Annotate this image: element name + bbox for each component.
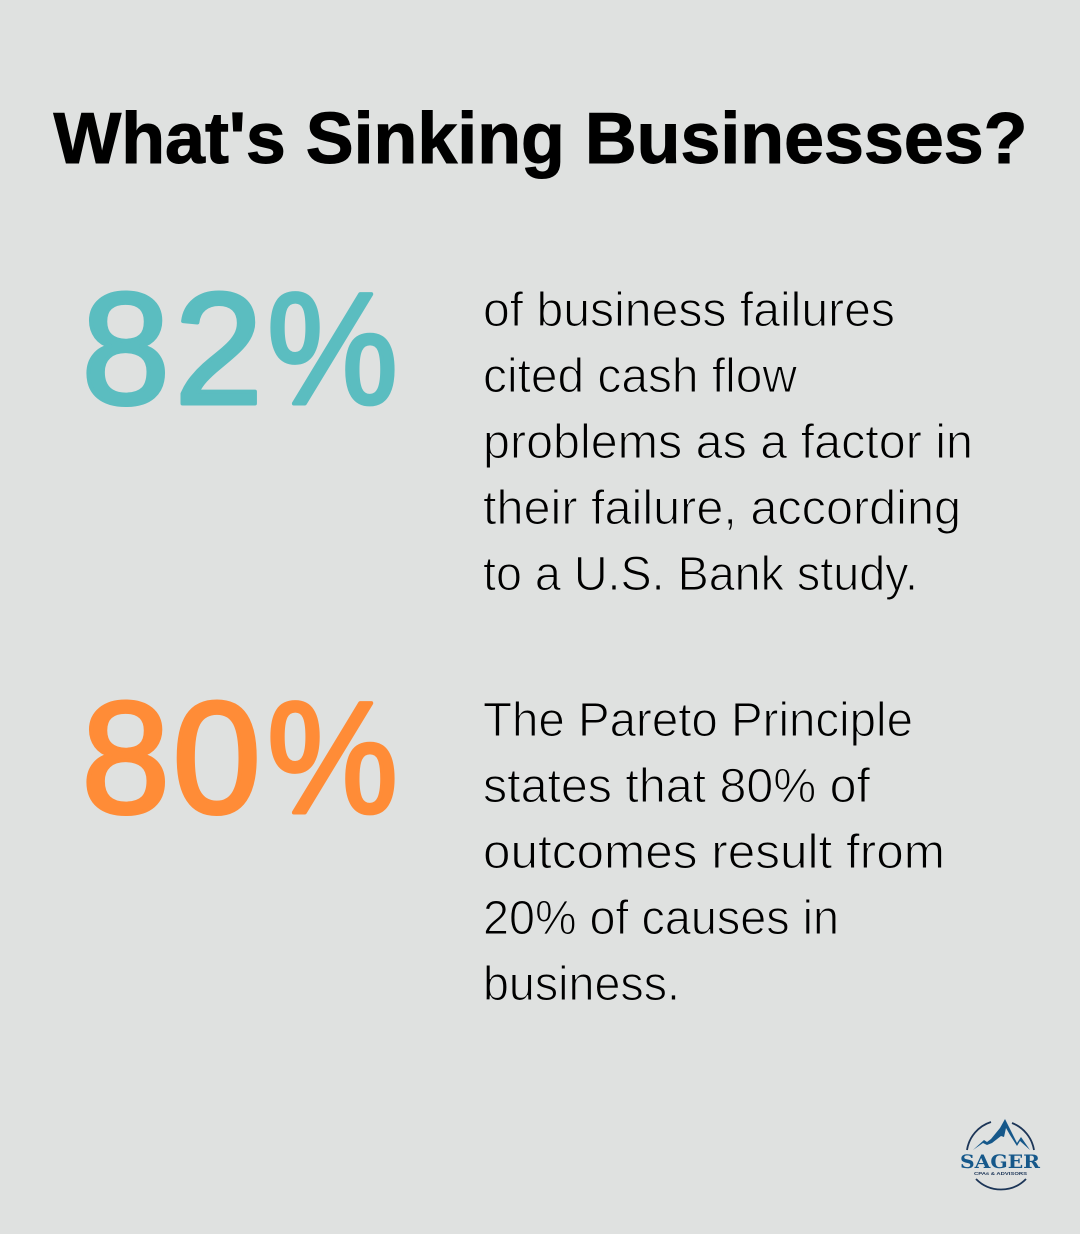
big number: 82%: 8 <box>82 260 170 438</box>
text block: cash flow description: their failure, according <box>483 482 961 535</box>
text block: cash flow description <box>483 284 973 601</box>
text block: Pareto Principle description: The Pareto Principle <box>483 694 913 747</box>
text block: Pareto Principle description: business. <box>483 958 680 1011</box>
big number: 80%: % <box>267 668 398 846</box>
text block: cash flow description: problems as a factor in <box>483 416 973 469</box>
text block: Pareto Principle description: outcomes result from <box>483 826 945 879</box>
logo ring arcs <box>967 1122 1034 1190</box>
panel: 80% statistic <box>82 668 945 1011</box>
logo tagline: CPAs & ADVISORS <box>974 1171 1027 1176</box>
text block: Pareto Principle description: 20% of causes in <box>483 892 839 945</box>
big number: 80%: 8 <box>82 668 170 846</box>
text block: cash flow description: cited cash flow <box>483 350 797 403</box>
big number: 82%: 2 <box>174 260 263 438</box>
text block: Pareto Principle description <box>483 694 945 1011</box>
icon: Sager logo <box>960 1119 1040 1190</box>
logo mountains <box>973 1119 1030 1150</box>
big number: 80%: 0 <box>172 668 261 846</box>
text block: cash flow description: to a U.S. Bank study. <box>483 548 918 601</box>
title: What's Sinking Businesses? <box>54 99 1028 179</box>
text block: Pareto Principle description: states that 80% of <box>483 760 871 813</box>
logo wordmark: SAGER <box>960 1151 1040 1173</box>
text block: cash flow description: of business failures <box>483 284 895 337</box>
big number: 82%: % <box>267 260 398 438</box>
panel: 82% statistic <box>82 260 973 601</box>
